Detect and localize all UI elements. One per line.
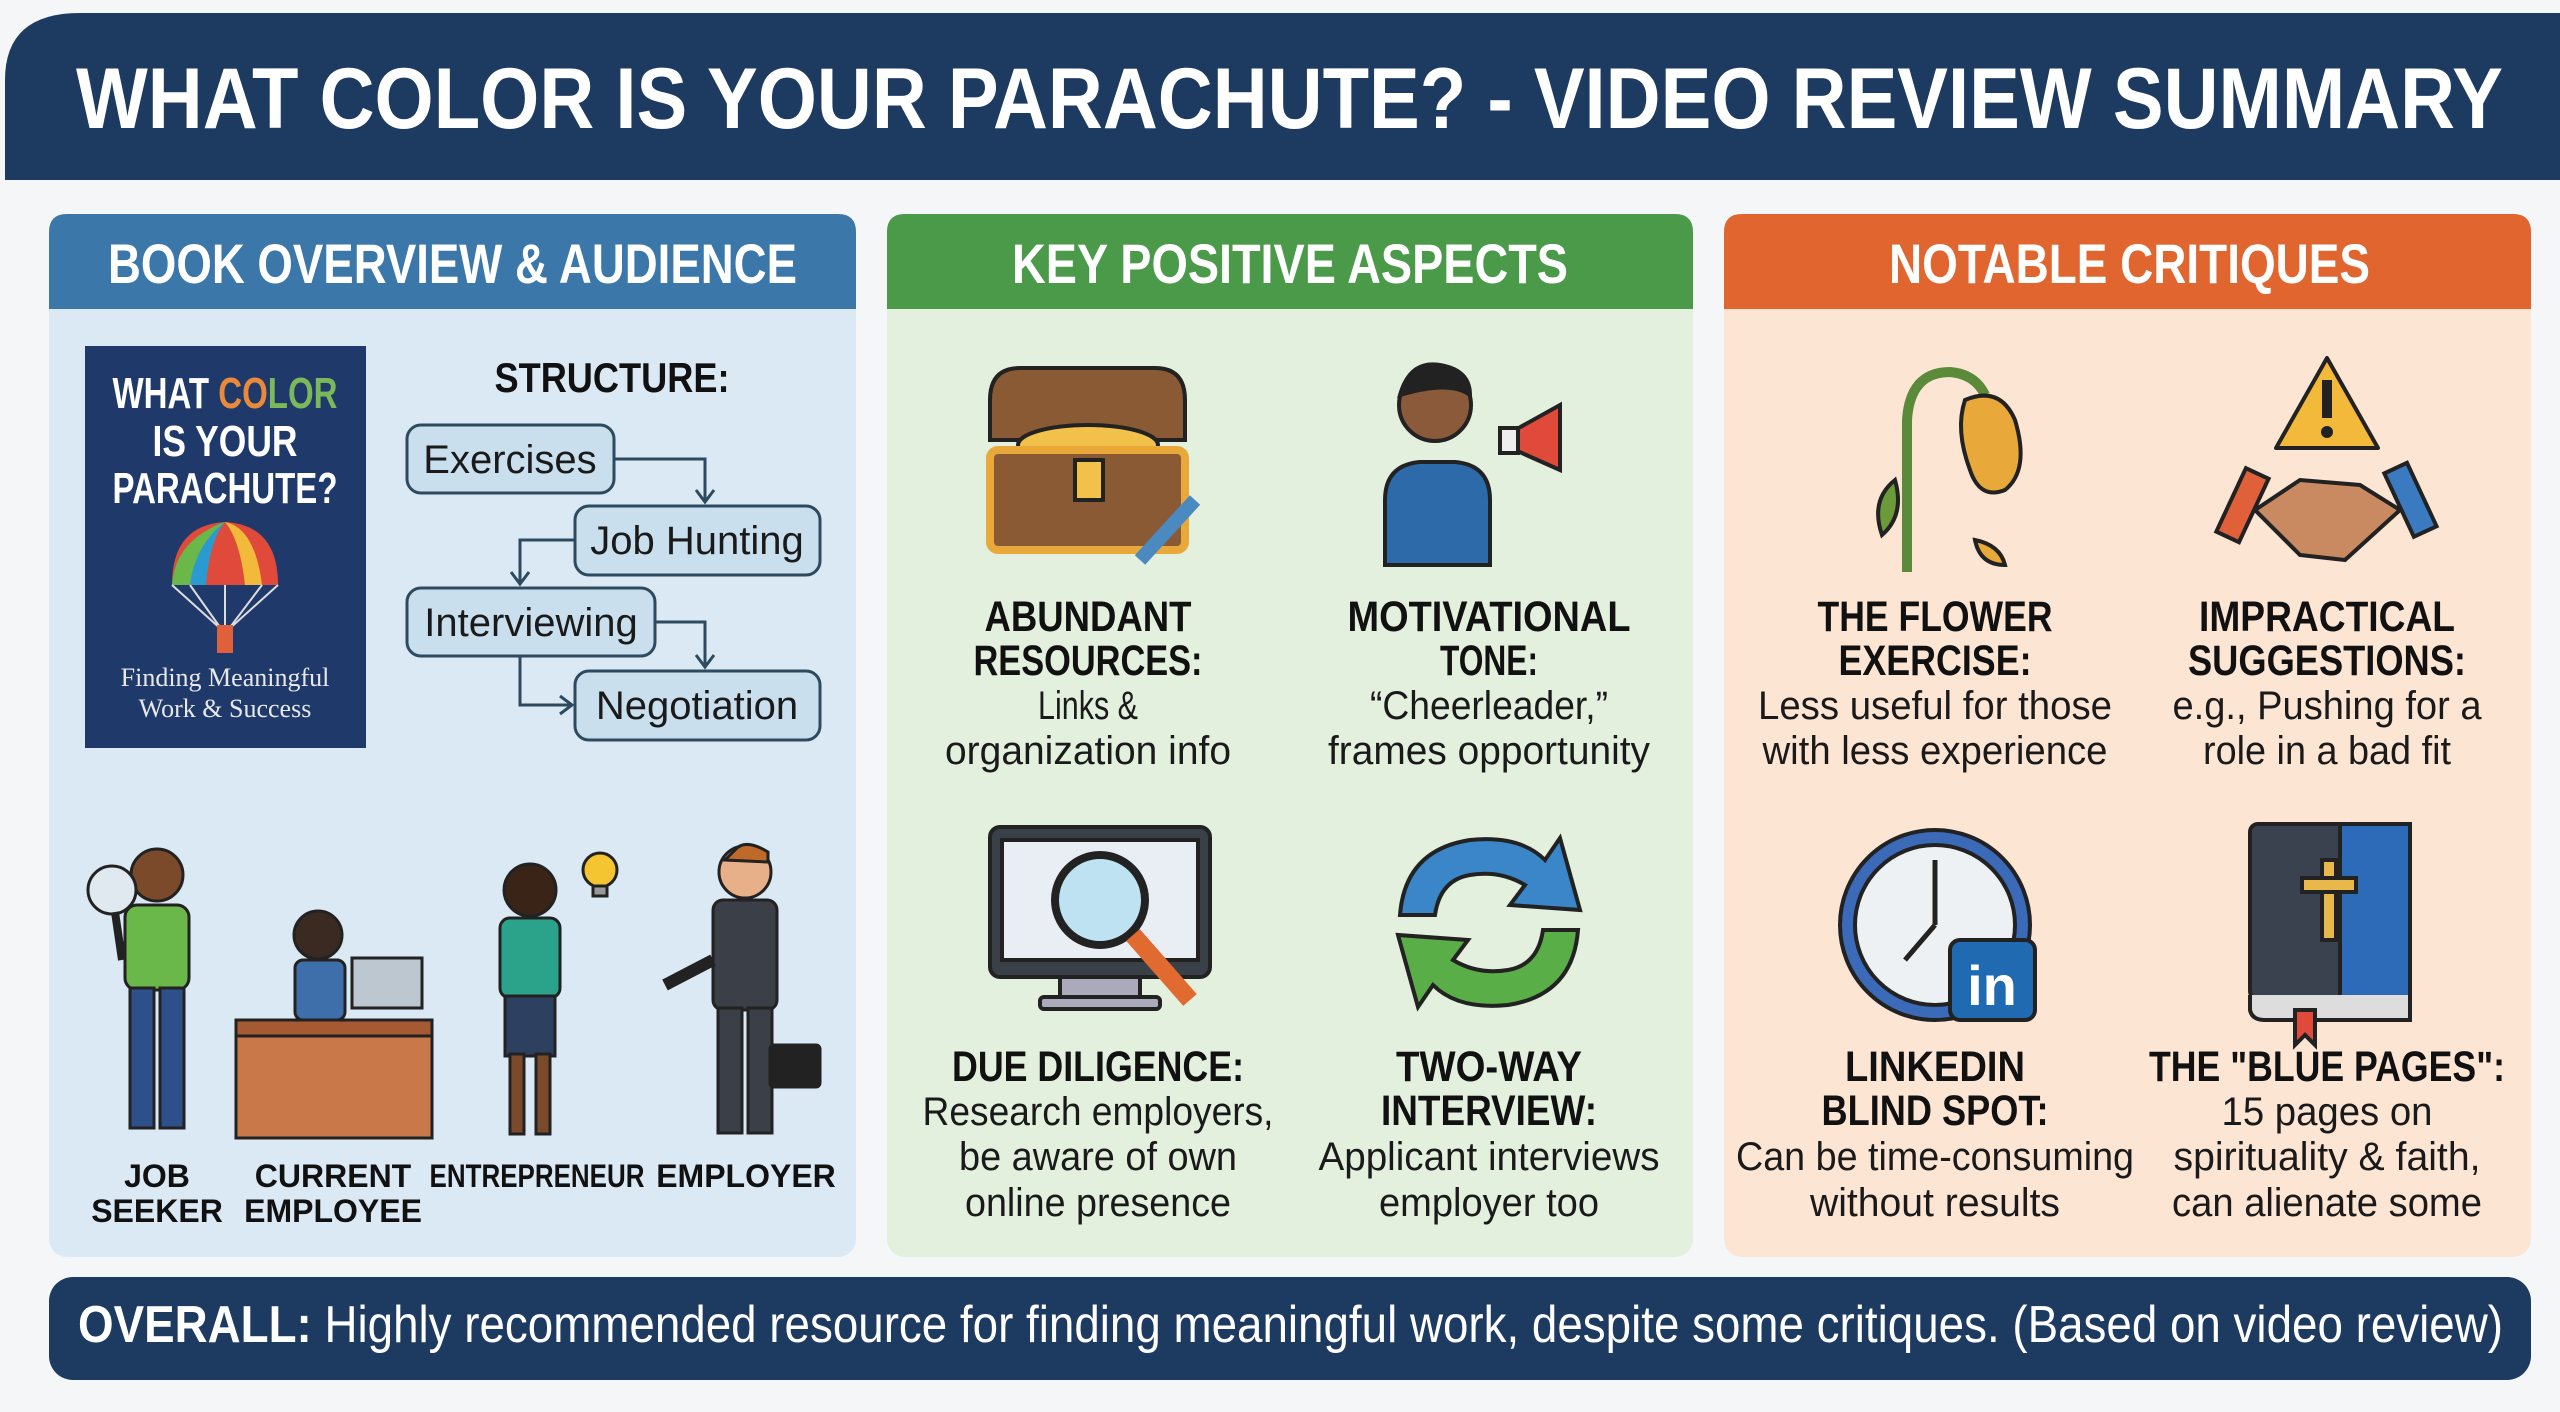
audience labels: JOB: [124, 1158, 190, 1194]
audience labels: CURRENT: [255, 1158, 412, 1194]
book cover: WHAT COLOR: [112, 369, 338, 418]
panel: key positive aspects: [887, 214, 1693, 1257]
audience labels: [91, 1158, 836, 1229]
panel: notable critiques: [1724, 214, 2531, 1257]
audience labels: SEEKER: [91, 1193, 223, 1229]
book cover: Finding Meaningful: [121, 663, 329, 692]
text: linkedin blind spot: without results: [1809, 1181, 2060, 1225]
text: two-way interview: INTERVIEW:: [1381, 1087, 1597, 1135]
text: linkedin blind spot: BLIND SPOT:: [1822, 1087, 2048, 1135]
text: the flower exercise: THE FLOWER: [1818, 593, 2052, 641]
structure flowchart: Job Hunting: [590, 519, 804, 563]
book cover: IS YOUR: [152, 417, 298, 466]
text: motivational tone: TONE:: [1440, 637, 1538, 685]
structure flowchart: Exercises: [423, 438, 597, 482]
icon: employer: [665, 844, 820, 1133]
book cover: [85, 346, 366, 748]
text: motivational tone: [1328, 593, 1650, 773]
icon: clock linkedin: in: [1967, 954, 2017, 1017]
icon: wilted flower: [1878, 372, 2021, 572]
text: the flower exercise: [1758, 593, 2112, 773]
icon: warning handshake: [2216, 358, 2437, 560]
text: impractical suggestions: IMPRACTICAL: [2199, 593, 2455, 641]
text: the blue pages: spirituality & faith,: [2174, 1135, 2480, 1179]
icon: blue book: [2250, 824, 2410, 1045]
icon: monitor with magnifier: [990, 827, 1210, 1009]
text: two-way interview: Applicant interviews: [1318, 1135, 1660, 1179]
icon: clock linkedin: [1840, 830, 2035, 1020]
structure flowchart: Negotiation: [596, 684, 798, 728]
book cover: PARACHUTE?: [112, 464, 338, 513]
text: abundant resources: [945, 593, 1231, 773]
text: two-way interview: [1318, 1043, 1660, 1225]
heading: book overview: BOOK OVERVIEW & AUDIENCE: [108, 232, 797, 295]
text: abundant resources: organization info: [945, 729, 1231, 773]
icon: two-way arrows: [1398, 838, 1580, 1007]
text: linkedin blind spot: LINKEDIN: [1845, 1043, 2025, 1091]
audience labels: EMPLOYEE: [244, 1193, 422, 1229]
book cover: Work & Success: [139, 694, 311, 723]
text: linkedin blind spot: Can be time-consuming: [1736, 1135, 2134, 1179]
text: impractical suggestions: SUGGESTIONS:: [2188, 637, 2466, 685]
text: impractical suggestions: role in a bad fit: [2203, 729, 2451, 773]
overall summary bar: [49, 1277, 2531, 1380]
text: due diligence: Research employers,: [922, 1090, 1274, 1134]
text: due diligence: online presence: [965, 1181, 1231, 1225]
text: the flower exercise: EXERCISE:: [1838, 637, 2032, 685]
text: the flower exercise: Less useful for those: [1758, 684, 2112, 728]
structure flowchart: Interviewing: [424, 601, 638, 645]
text: two-way interview: employer too: [1379, 1181, 1599, 1225]
text: due diligence: be aware of own: [959, 1135, 1237, 1179]
icon: megaphone person: [1385, 364, 1560, 565]
text: the blue pages: [2149, 1043, 2505, 1225]
text: the flower exercise: with less experience: [1762, 729, 2108, 773]
icon: treasure chest: [990, 368, 1195, 560]
text: linkedin blind spot: [1736, 1043, 2134, 1225]
panel: book overview & audience: [49, 214, 856, 1257]
text: motivational tone: “Cheerleader,”: [1370, 684, 1608, 728]
audience labels: EMPLOYER: [656, 1158, 836, 1194]
title bar: [5, 13, 2560, 180]
text: motivational tone: frames opportunity: [1328, 729, 1650, 773]
text: impractical suggestions: e.g., Pushing for a: [2172, 684, 2482, 728]
structure flowchart: STRUCTURE:: [494, 354, 730, 401]
text: the blue pages: 15 pages on: [2222, 1090, 2432, 1134]
text: abundant resources: Links &: [1038, 684, 1138, 728]
text: due diligence: [922, 1043, 1274, 1225]
text: abundant resources: RESOURCES:: [974, 637, 1202, 685]
text: abundant resources: ABUNDANT: [984, 593, 1192, 641]
text: due diligence: DUE DILIGENCE:: [952, 1043, 1244, 1091]
heading: key positive aspects: KEY POSITIVE ASPECTS: [1012, 232, 1568, 295]
icon: entrepreneur: [500, 853, 617, 1134]
icon: current employee: [236, 911, 432, 1138]
text: motivational tone: MOTIVATIONAL: [1348, 593, 1630, 641]
text: two-way interview: TWO-WAY: [1396, 1043, 1582, 1091]
structure flowchart: [407, 354, 820, 740]
text: impractical suggestions: [2172, 593, 2482, 773]
heading: notable critiques: NOTABLE CRITIQUES: [1889, 232, 2370, 295]
icon: job seeker: [88, 849, 189, 1128]
audience labels: ENTREPRENEUR: [430, 1158, 644, 1194]
text: the blue pages: can alienate some: [2172, 1181, 2482, 1225]
